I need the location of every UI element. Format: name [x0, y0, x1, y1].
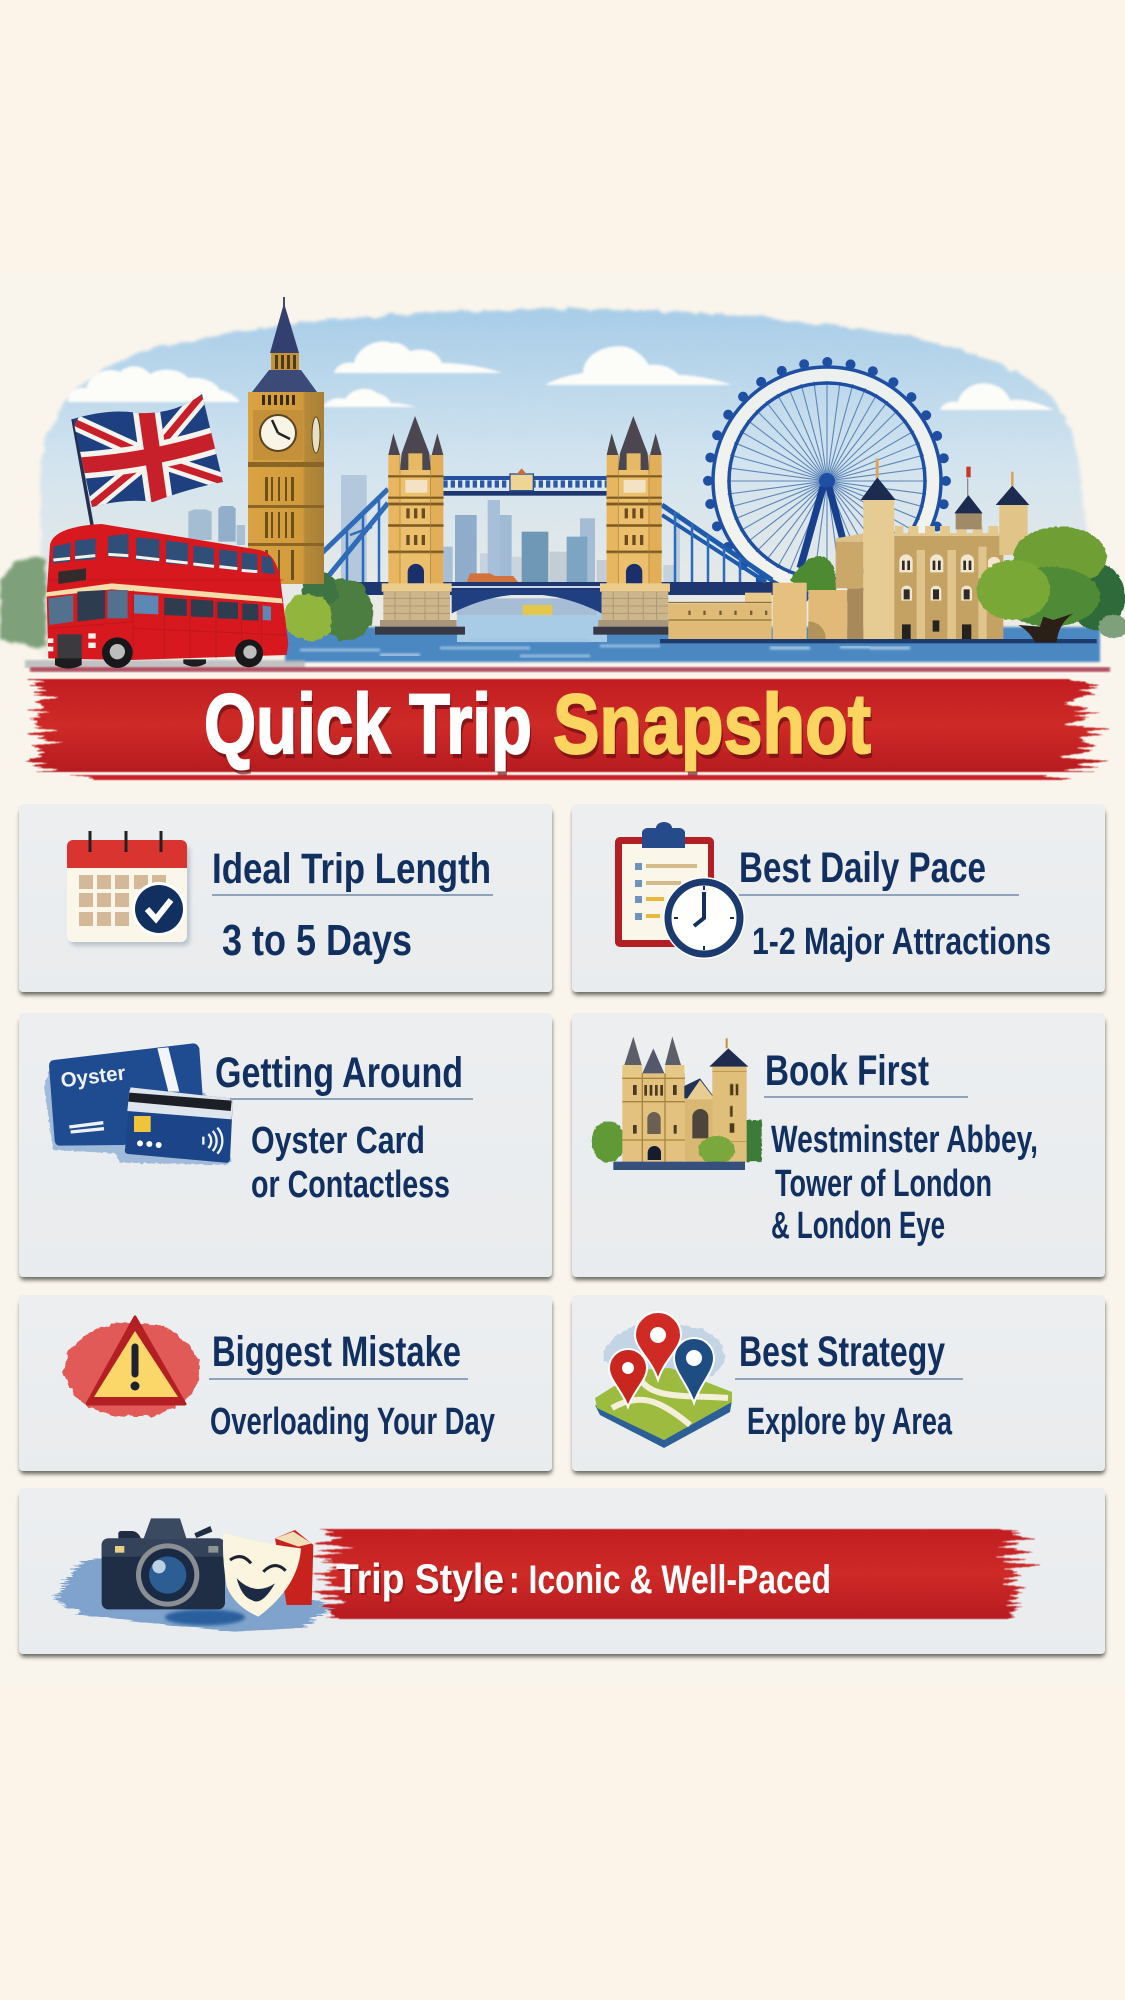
low curtain wall	[668, 593, 772, 639]
Big Ben	[248, 297, 324, 584]
bus grille	[57, 634, 82, 659]
flag	[71, 394, 223, 525]
Tower Bridge	[322, 416, 775, 635]
left turret	[861, 458, 896, 639]
value	[251, 1120, 450, 1206]
abbey nave	[684, 1078, 715, 1162]
centre turret	[954, 467, 983, 529]
distant skyline	[341, 475, 680, 583]
trip style label: Trip Style	[336, 1555, 504, 1602]
bus panel seams	[48, 580, 287, 658]
keep windows	[899, 554, 1000, 639]
flag pole	[73, 419, 92, 525]
bus stripe	[46, 583, 283, 603]
London Eye	[708, 362, 946, 600]
trip style label: : Iconic & Well-Paced	[509, 1558, 831, 1602]
title: Quick Trip	[204, 677, 532, 771]
right tower	[593, 416, 683, 635]
panel: book first	[572, 1013, 1105, 1280]
title: Quick Trip	[206, 682, 534, 776]
sky wash	[40, 309, 1096, 660]
panel: ideal trip length	[19, 804, 552, 995]
tree near bridge	[284, 572, 373, 642]
abbey base	[613, 1162, 745, 1170]
panel: best strategy	[572, 1295, 1105, 1474]
bascule arch	[452, 590, 602, 613]
high walkway	[443, 468, 607, 496]
value: Tower of London	[775, 1163, 992, 1205]
heading: Ideal Trip Length	[212, 845, 491, 893]
icon: calendar	[67, 831, 190, 946]
panel: trip style	[19, 1488, 1105, 1657]
under-arch water and boat	[457, 573, 597, 615]
heading: Best Daily Pace	[739, 844, 986, 892]
Oyster card	[49, 1043, 205, 1146]
icon: Oyster and contactless cards	[44, 1043, 233, 1165]
lower windows	[48, 590, 271, 625]
red mask behind	[275, 1530, 313, 1605]
title: Snapshot	[555, 682, 873, 776]
wheels under body	[55, 658, 206, 669]
trip style label: Trip Style	[338, 1557, 506, 1604]
blue brush smear	[55, 1558, 332, 1632]
hero illustration: London skyline	[0, 297, 1125, 672]
title banner	[40, 677, 1084, 780]
panel: best daily pace	[572, 804, 1105, 995]
red brush stroke	[330, 1529, 1015, 1619]
abbey front tree	[698, 1136, 735, 1164]
dark smear	[165, 1609, 245, 1625]
title	[204, 677, 873, 776]
gatehouse	[773, 583, 807, 639]
Oyster card: Oyster	[59, 1062, 127, 1092]
icon: clipboard and clock	[615, 822, 745, 959]
Tower of London	[660, 458, 1097, 643]
bus body	[47, 524, 288, 660]
title: Snapshot	[553, 677, 871, 771]
panel: biggest mistake	[19, 1295, 552, 1474]
round bastion	[836, 533, 863, 588]
left tree	[0, 557, 46, 646]
window sills	[53, 554, 257, 572]
value	[771, 1119, 1038, 1247]
gate wall	[808, 588, 863, 639]
heading: Book First	[765, 1047, 929, 1095]
icon: Westminster Abbey	[592, 1037, 762, 1170]
panel: getting around	[19, 1013, 552, 1280]
upper windows	[53, 534, 275, 574]
value: Overloading Your Day	[210, 1401, 495, 1443]
heading: Getting Around	[215, 1049, 463, 1097]
road ground	[25, 660, 305, 668]
value: Oyster Card	[251, 1120, 425, 1162]
White Tower keep	[893, 526, 1003, 639]
heading: Biggest Mistake	[212, 1328, 461, 1376]
bank card	[125, 1087, 233, 1163]
far-left skyline	[188, 506, 245, 545]
brush stroke	[40, 679, 1084, 780]
destination box	[58, 568, 86, 584]
value: & London Eye	[771, 1205, 945, 1247]
left tower	[375, 416, 465, 635]
River Thames	[285, 612, 1100, 662]
camera	[102, 1518, 225, 1609]
right turret	[996, 472, 1029, 555]
rear wheel	[235, 639, 263, 667]
trip style label	[336, 1555, 831, 1604]
low deck	[345, 582, 775, 595]
front wheel	[102, 637, 133, 668]
abbey towers	[622, 1037, 685, 1162]
abbey trees	[592, 1120, 762, 1162]
heading: Best Strategy	[739, 1328, 945, 1376]
icons: camera and theatre mask	[55, 1518, 332, 1632]
headlights	[48, 633, 96, 651]
value: 3 to 5 Days	[222, 916, 412, 965]
tree behind castle	[790, 556, 836, 592]
clouds	[68, 341, 1054, 410]
infographic canvas	[0, 297, 1125, 1660]
theatre mask	[223, 1533, 301, 1617]
trees right	[977, 527, 1125, 642]
value: or Contactless	[251, 1164, 450, 1206]
paper band	[0, 272, 1125, 1690]
road line	[30, 667, 1110, 672]
value: Westminster Abbey,	[771, 1119, 1038, 1161]
castle base line	[660, 639, 1097, 643]
icon: warning triangle	[64, 1317, 200, 1417]
icon: map with pins	[595, 1312, 732, 1448]
abbey right tower	[709, 1038, 748, 1163]
double-decker bus	[46, 524, 288, 669]
value: Explore by Area	[747, 1401, 953, 1443]
value: 1-2 Major Attractions	[752, 921, 1051, 963]
suspension cables	[322, 489, 772, 584]
